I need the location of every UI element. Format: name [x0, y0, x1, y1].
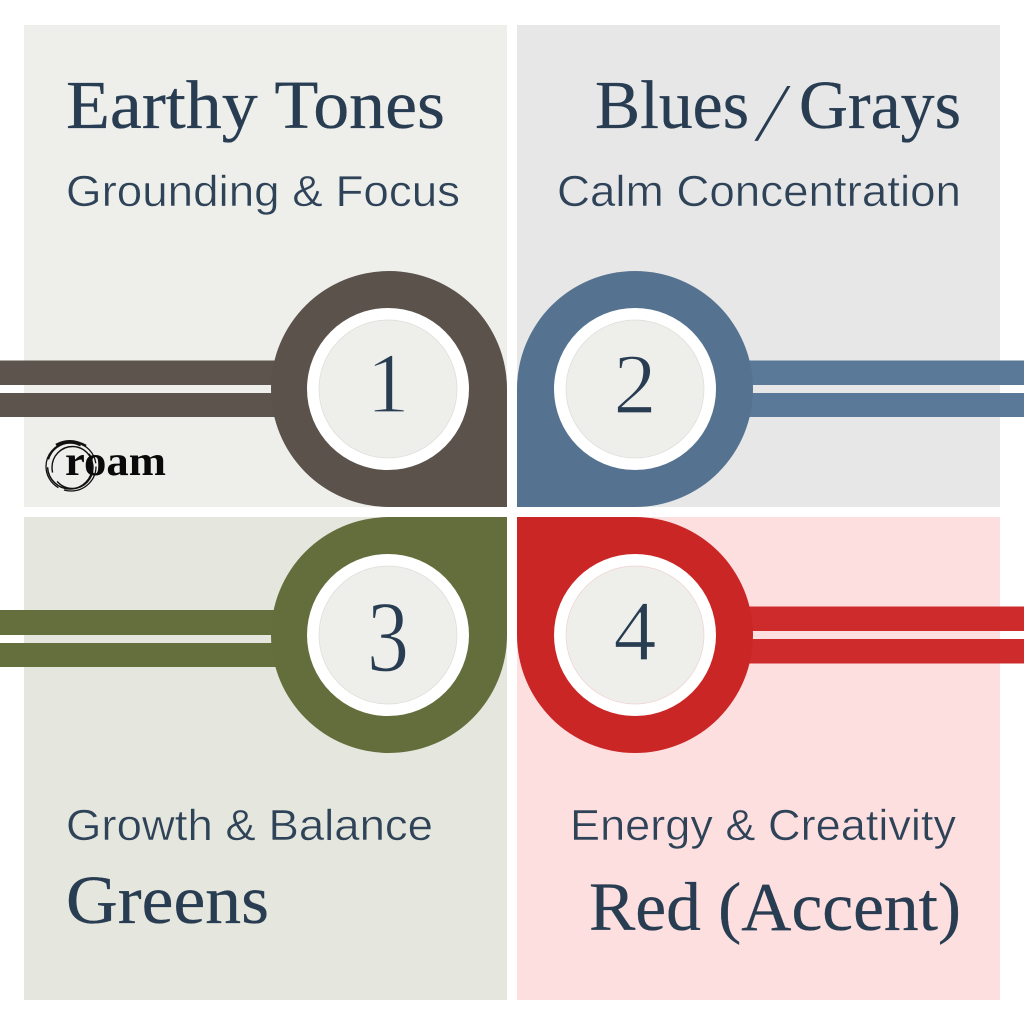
heading: Earthy Tones: Earthy Tones: [66, 67, 445, 143]
badge: number 4: [517, 517, 753, 753]
badge: number 3: 3: [367, 581, 409, 694]
heading: Blues/Grays: Grays: [799, 67, 961, 143]
subheading: Growth & Balance: Growth & Balance: [66, 801, 433, 850]
subheading: Calm Concentration: Calm Concentration: [557, 167, 961, 216]
panel: blues and grays: [517, 25, 1024, 507]
logo: roam: [46, 439, 166, 491]
heading: Greens: Greens: [66, 862, 269, 938]
logo: roam: roam: [65, 439, 166, 485]
panel: red accent: [517, 517, 1024, 1000]
subheading: Energy & Creativity: Energy & Creativity: [570, 801, 956, 850]
badge: number 4: 4: [614, 583, 656, 679]
badge: number 3: [271, 517, 507, 753]
heading: Blues/Grays: [595, 66, 961, 160]
heading: Blues/Grays: /: [752, 66, 794, 160]
double bar: blue: [740, 360, 1024, 417]
panel: greens: [0, 517, 507, 1000]
double bar: brown: [0, 360, 285, 417]
badge: number 2: [517, 271, 753, 507]
heading: Red (Accent): Red (Accent): [589, 869, 961, 945]
badge: number 1: 1: [366, 335, 410, 431]
double bar: green: [0, 610, 285, 667]
badge: number 2: 2: [614, 336, 656, 432]
heading: Blues/Grays: Blues: [595, 67, 749, 143]
panel: earthy tones: [0, 25, 507, 507]
badge: number 1: [271, 271, 507, 507]
subheading: Grounding & Focus: Grounding & Focus: [66, 167, 460, 216]
double bar: red: [740, 606, 1024, 664]
